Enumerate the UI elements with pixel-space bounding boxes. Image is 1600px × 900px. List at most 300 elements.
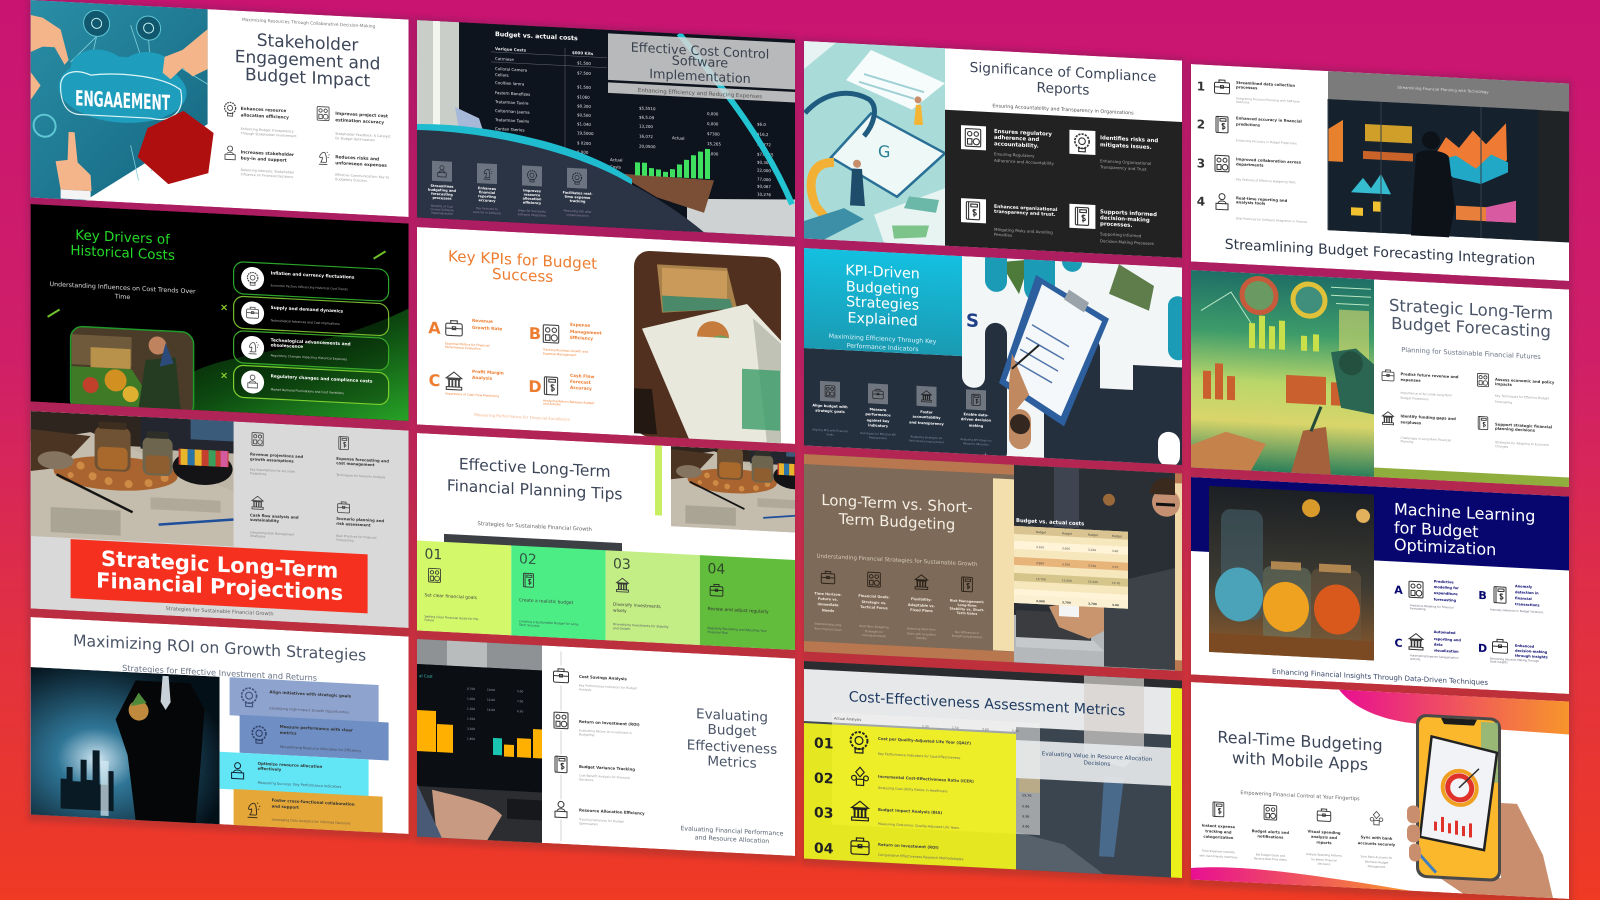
budget table: Varique Costs bbox=[495, 46, 527, 53]
comparison 4: Stability vs. Short- bbox=[950, 607, 985, 612]
title: Strategic Long-Term bbox=[1389, 296, 1553, 323]
budget table: $16,2 bbox=[757, 132, 769, 137]
faint table: 5.00 bbox=[1022, 804, 1029, 809]
metric 03: 03 bbox=[814, 805, 833, 822]
item: funding gaps: Planning bbox=[1400, 439, 1414, 444]
step 03: 03 bbox=[613, 556, 631, 573]
comparison 2: Strategic vs. bbox=[861, 600, 887, 605]
feature 3: Software Integration bbox=[518, 212, 547, 218]
step 01 bbox=[417, 540, 511, 635]
item: predict revenue: expenses bbox=[1400, 377, 1421, 383]
metric 03: Budget Impact Analysis (BIA) bbox=[878, 807, 942, 815]
capability B: transactions bbox=[1515, 602, 1540, 607]
budget table: $6,5.09 bbox=[639, 114, 655, 120]
item: organizational transparency: Enhances organizational bbox=[994, 204, 1058, 213]
budget table: 3.00 bbox=[1112, 549, 1118, 553]
photo: dashboard on monitor: 6.50 bbox=[517, 709, 523, 713]
panel: evaluating budget metrics slide bbox=[417, 639, 795, 857]
budget table: 3,700 bbox=[1062, 562, 1070, 567]
photo: coin jars and papers bbox=[31, 411, 234, 546]
feature 4: time expense bbox=[565, 195, 591, 200]
budget table: 11,000 bbox=[1062, 578, 1072, 583]
title: Machine Learning bbox=[1394, 499, 1535, 526]
item: scenario planning: Scenario planning and bbox=[336, 516, 384, 523]
metric 1 bbox=[551, 665, 638, 694]
item: cost estimation: for Budget Optimization bbox=[335, 136, 375, 142]
item: scenario planning: risk assessment bbox=[336, 521, 371, 528]
strategy 3: Foster bbox=[920, 410, 933, 415]
budget table: Tratarman Taeins bbox=[494, 117, 529, 124]
budget table: 19,5000 bbox=[577, 130, 594, 136]
dark curved panel bbox=[417, 123, 704, 232]
budget table: Costs bbox=[610, 164, 621, 170]
subtitle: Understanding Influences on Cost Trends Over bbox=[50, 281, 196, 296]
item: reduces risks: Effective Communication: Key to bbox=[335, 173, 389, 179]
title: Optimization bbox=[1394, 535, 1496, 559]
faint table: 15.70 bbox=[1022, 793, 1031, 798]
feature 1: Streamlines bbox=[431, 184, 453, 189]
green bar chart bbox=[635, 145, 710, 179]
subtitle: Strategies for Sustainable Financial Growth bbox=[166, 606, 274, 618]
capability A bbox=[1394, 577, 1459, 613]
budget table: $1.040 bbox=[577, 121, 591, 127]
step 4: 4 bbox=[1197, 194, 1205, 209]
title: Effective Long-Term bbox=[459, 455, 611, 481]
item: revenue projections: growth assumptions bbox=[250, 456, 294, 464]
item: scenario planning: Best Practices for Financial bbox=[336, 534, 377, 540]
item: reduces risks: unforeseen expenses bbox=[335, 160, 387, 169]
illustration: isometric documents: G bbox=[878, 142, 890, 161]
budget table: $5,5510 bbox=[639, 105, 656, 111]
item: assess impacts: impacts bbox=[1495, 381, 1513, 387]
budget table: $8.300 bbox=[577, 103, 591, 109]
comparison 1: Understanding Long- bbox=[814, 622, 842, 627]
item: identifies risks: Transparency and Trust bbox=[1099, 164, 1147, 172]
budget table: Fastern Banefizes bbox=[495, 90, 530, 97]
capability B: B bbox=[1478, 589, 1487, 602]
panel: key KPIs slide bbox=[417, 227, 795, 445]
item: resource allocation: allocation efficiency bbox=[241, 112, 289, 121]
metric 04: Return on Investment (ROI) bbox=[878, 842, 939, 850]
title box: Software bbox=[672, 54, 728, 72]
strategy 4 bbox=[960, 389, 992, 447]
step 03 bbox=[606, 550, 700, 645]
KPI B: Tracking Business Growth and bbox=[542, 347, 588, 354]
strategy card 3: Measuring Success: Key Performance Indicators bbox=[258, 781, 341, 789]
comparison 4: Risk Management: bbox=[950, 599, 984, 604]
photo: open report on desk bbox=[634, 250, 781, 444]
item: funding gaps bbox=[1382, 411, 1456, 446]
driver row 3: Technological advancements and bbox=[271, 337, 351, 348]
step 01: Set clear financial goals bbox=[424, 592, 478, 601]
photo: man in suit bbox=[804, 661, 1182, 879]
step 04 bbox=[700, 555, 795, 650]
photo: analyst at laptop bbox=[1014, 465, 1180, 671]
budget table: Budget bbox=[1036, 530, 1047, 535]
item: assess impacts: Assess economic and policy bbox=[1495, 377, 1555, 385]
KPI B: Efficiency bbox=[570, 335, 593, 342]
item: identifies risks: mitigates issues. bbox=[1100, 142, 1152, 151]
feature 1 bbox=[1199, 801, 1238, 859]
subtitle: Understanding Financial Strategies for Sustainable Growth bbox=[817, 554, 978, 568]
faint table: 1.50 bbox=[952, 726, 959, 730]
panel: machine learning slide bbox=[1191, 477, 1569, 694]
feature 4 bbox=[1358, 810, 1396, 870]
budget table: 3,700 bbox=[1062, 600, 1071, 605]
strategy 1: Goals bbox=[826, 432, 834, 437]
metric 04 bbox=[814, 836, 964, 864]
photo: businessman and skyline bbox=[31, 667, 220, 825]
item: resource allocation: Enhancing Budget Transparency bbox=[241, 127, 294, 134]
photo: coin jars bbox=[671, 436, 817, 534]
comparison 3: Balancing Short-Term bbox=[907, 626, 936, 632]
panel: stakeholder engagement slide bbox=[31, 0, 409, 217]
timeline line bbox=[560, 651, 562, 841]
title: for Budget bbox=[1394, 518, 1479, 541]
title: Budget Forecasting bbox=[1391, 314, 1551, 341]
capability D: decision-making bbox=[1515, 649, 1548, 654]
capability B: detection in bbox=[1515, 590, 1539, 595]
strategy 3: Performance Improvement bbox=[909, 438, 944, 444]
budget table: $7300 bbox=[707, 131, 720, 137]
feature 2 bbox=[473, 163, 501, 215]
feature 1: Control Software bbox=[430, 207, 454, 212]
comparison 2: Immediate Needs bbox=[862, 633, 886, 638]
step 2: Enhancing Accuracy in Budget Projections bbox=[1236, 138, 1297, 145]
driver row 1 bbox=[234, 261, 389, 301]
feature 3: Improves bbox=[523, 188, 541, 193]
panel: key drivers slide bbox=[31, 204, 409, 429]
feature 3 bbox=[518, 165, 547, 218]
title: with Mobile Apps bbox=[1232, 748, 1368, 774]
step 3: Improved collaboration across bbox=[1236, 156, 1302, 165]
budget table: 3,100 bbox=[1036, 545, 1044, 549]
photo: dashboard on monitor: 1.500 bbox=[467, 717, 475, 721]
subtitle: Empowering Financial Control at Your Fingertips bbox=[1240, 790, 1360, 802]
item: cash flow bbox=[250, 496, 299, 540]
strategy 4: Analyzing KPI Impact on bbox=[960, 437, 992, 443]
title box bbox=[608, 33, 795, 103]
item: predict revenue bbox=[1382, 370, 1459, 403]
strategy card 2: Measure performance with clear bbox=[280, 724, 353, 733]
feature 1: categorization bbox=[1203, 835, 1234, 840]
photo: dashboard on monitor: 12.00 bbox=[487, 698, 495, 702]
budget table: 10,276 bbox=[757, 192, 771, 197]
item: resource allocation: Through Stakeholder Involvement bbox=[240, 131, 297, 138]
title: Financial Planning Tips bbox=[447, 477, 623, 504]
KPI D bbox=[528, 371, 595, 408]
green glow bbox=[160, 308, 408, 421]
KPI A: Revenue bbox=[472, 318, 493, 325]
item: cost estimation: Stakeholder Feedback: A Catalyst bbox=[335, 132, 391, 139]
comparison 4: Term Gains bbox=[957, 611, 977, 616]
budget table: $ 0200 bbox=[577, 140, 591, 146]
title: Explained bbox=[848, 310, 918, 330]
title: Success bbox=[492, 265, 553, 286]
feature 3: for Better Financial bbox=[1311, 857, 1337, 863]
item: identifies risks bbox=[1069, 130, 1158, 172]
title: Maximizing ROI on Growth Strategies bbox=[73, 631, 366, 665]
title banner: Financial Projections bbox=[96, 567, 343, 605]
budget table: 22,000 bbox=[757, 168, 771, 173]
subtitle: Planning for Sustainable Financial Futures bbox=[1401, 346, 1541, 361]
feature 1: Instant expense bbox=[1202, 824, 1236, 829]
title box: Enhancing Efficiency and Reducing Expenses bbox=[638, 88, 762, 100]
capability C: visualization bbox=[1434, 649, 1459, 654]
feature 1: with User-Friendly Interfaces bbox=[1199, 853, 1238, 859]
budget table: 15,265 bbox=[707, 141, 721, 147]
strategy card 1: Identifying High-Impact Growth Opportunities bbox=[269, 706, 349, 714]
item: stakeholder buy-in: Influence on Financial Decisions bbox=[241, 172, 293, 179]
capability A: forecasting bbox=[1434, 598, 1457, 603]
comparison 2 bbox=[858, 572, 890, 638]
feature 4: Seamless Budget bbox=[1365, 859, 1388, 865]
item: revenue projections: Revenue projections and bbox=[250, 451, 303, 459]
comparison 1: Needs bbox=[822, 608, 834, 613]
subtitle: Strategies for Sustainable Financial Growth bbox=[478, 521, 592, 533]
strategy 2: against key bbox=[867, 418, 890, 423]
strategy 3 bbox=[909, 385, 945, 444]
budget table: Colterman Jaema bbox=[495, 108, 530, 115]
KPI A: Essential Metrics for Financial bbox=[445, 341, 490, 348]
capability C: Automating Expense Categorization bbox=[1410, 653, 1459, 660]
step 2: 2 bbox=[1197, 117, 1205, 132]
budget table: 0,000 bbox=[707, 151, 719, 157]
photo: engagement illustration bbox=[31, 0, 208, 207]
item: cash flow: Strategies bbox=[250, 534, 266, 539]
capability C bbox=[1394, 628, 1461, 663]
budget table: Tratarman Tavire bbox=[494, 99, 529, 106]
title: Effectiveness bbox=[687, 737, 777, 758]
item: regulatory adherence bbox=[961, 125, 1054, 166]
comparison 2: Financial Goals: bbox=[858, 594, 890, 599]
faint table: 3.50 bbox=[1022, 814, 1029, 819]
item: stakeholder buy-in: buy-in and support bbox=[241, 155, 287, 164]
strategy card 3: Optimize resource allocation bbox=[258, 761, 322, 769]
metric 01: Key Performance Indicators for Cost-Effectiveness bbox=[878, 752, 961, 760]
title: Key Drivers of bbox=[75, 227, 171, 248]
title: Budget bbox=[708, 722, 756, 740]
strategy 2: Measurement bbox=[869, 435, 887, 440]
budget table: $.000 bbox=[577, 149, 589, 155]
budget table: Budget vs. actual costs bbox=[1016, 518, 1084, 527]
faint table: 3.00 bbox=[1022, 824, 1029, 829]
budget table: $0,500 bbox=[577, 112, 591, 118]
feature 4: Measuring ROI after bbox=[564, 209, 592, 214]
capability A: Predictive Modeling for Financial bbox=[1410, 603, 1454, 610]
item: revenue projections: Projections bbox=[250, 471, 267, 476]
feature 4: tracking bbox=[570, 199, 586, 204]
metric 4 bbox=[551, 799, 645, 829]
feature 2: Set Budget Goals and bbox=[1256, 852, 1285, 858]
driver row 2 bbox=[234, 296, 389, 336]
feature 4: Sync with bank bbox=[1361, 835, 1393, 841]
title: Real-Time Budgeting bbox=[1217, 727, 1383, 755]
photo: analyst at data wall bbox=[1328, 99, 1569, 244]
feature 1: budgeting and bbox=[428, 188, 457, 193]
metric 4: Resource Allocation Efficiency bbox=[579, 807, 645, 816]
feature 3: efficiency bbox=[523, 200, 542, 205]
strategy 1 bbox=[812, 380, 848, 437]
strategy 2 bbox=[860, 383, 896, 441]
title: Engagement and bbox=[235, 47, 380, 75]
comparison 2: Tactical Focus bbox=[860, 605, 888, 610]
footer: Measuring Performance for Financial Excellence bbox=[474, 412, 570, 422]
step 1: Solutions bbox=[1236, 100, 1250, 105]
budget table: 16,072 bbox=[639, 133, 653, 139]
item: expense forecasting bbox=[335, 436, 389, 480]
feature 2: Receive Real-Time Alerts bbox=[1254, 856, 1288, 862]
strategy card 4: Foster cross-functional collaboration bbox=[272, 797, 355, 807]
budget table: Budget bbox=[1062, 531, 1073, 536]
item: organizational transparency: Mitigating Risks and Avoiding bbox=[994, 227, 1053, 235]
comparison 4 bbox=[950, 576, 985, 639]
budget table: $1.500 bbox=[577, 60, 591, 66]
step 4: Real-time reporting and bbox=[1236, 195, 1288, 203]
budget table: 0,000 bbox=[707, 111, 719, 117]
comparison 4: Long-Term bbox=[957, 603, 977, 608]
budget table: 3.00 bbox=[1112, 603, 1119, 607]
budget table: Catmiese bbox=[495, 56, 514, 62]
driver row 4 bbox=[234, 365, 389, 405]
driver row 2: Supply and demand dynamics bbox=[271, 305, 343, 315]
feature 2: Budget alerts and bbox=[1252, 829, 1289, 835]
feature 4: Sync Bank Accounts for bbox=[1361, 854, 1393, 860]
photo: dashboard on monitor: 14.00 bbox=[487, 708, 495, 712]
KPI D: Accuracy bbox=[570, 385, 592, 392]
capability D: Enhanced bbox=[1515, 644, 1535, 649]
driver row 4: Market Demand Fluctuations and Cost Variations bbox=[271, 387, 344, 395]
KPI B: Management bbox=[570, 329, 602, 337]
capability D: D bbox=[1478, 642, 1487, 655]
driver row 3: Regulatory Changes Impacting Historical Expenses bbox=[271, 353, 348, 361]
faint table: 2.30 bbox=[922, 724, 929, 728]
feature 3 bbox=[1306, 808, 1343, 867]
sub band bbox=[1016, 740, 1171, 786]
KPI B: B bbox=[529, 324, 541, 343]
KPI B bbox=[529, 320, 602, 359]
strategy card 4 bbox=[234, 789, 383, 834]
feature 1: Track Expenses Instantly bbox=[1201, 849, 1235, 854]
item: informed decisions: processes. bbox=[1100, 221, 1132, 229]
budget table: Conten Taeries bbox=[495, 126, 525, 133]
panel: compliance reports slide bbox=[804, 41, 1182, 258]
metric 03: Measuring Outcomes: Quality-Adjusted Life Years bbox=[878, 822, 959, 830]
illustration: clipboard with pill stripes: S bbox=[966, 310, 979, 332]
feature 3: Decisions bbox=[1318, 862, 1331, 866]
KPI B: Expense Management bbox=[543, 352, 577, 357]
capability B: financial bbox=[1515, 596, 1532, 601]
illustration: clipboard with pill stripes bbox=[804, 228, 1188, 473]
budget table: $7.500 bbox=[577, 70, 591, 76]
comparison 1 bbox=[813, 571, 842, 632]
strategy 2: Techniques for Effective KPI bbox=[860, 431, 896, 437]
item: resource allocation: Enhances resource bbox=[241, 106, 286, 114]
step 01: Future bbox=[424, 618, 434, 622]
panel: mobile budgeting slide bbox=[1191, 682, 1569, 899]
panel: maximizing ROI slide bbox=[31, 617, 409, 835]
budget table: $73,765 bbox=[757, 152, 774, 157]
strategy 4: Resource Allocation bbox=[963, 441, 989, 447]
step 3 bbox=[1197, 154, 1302, 185]
grey header band: Streamlining Financial Planning with Technology bbox=[1397, 85, 1489, 94]
panel: cost control software slide bbox=[417, 20, 795, 237]
feature 1: forecasting bbox=[431, 192, 453, 197]
red hexagon bbox=[138, 109, 214, 186]
strategy card 2: Streamlining Resource Allocation for Efficiency bbox=[280, 745, 361, 753]
KPI C bbox=[429, 367, 504, 398]
budget table: 3,700 bbox=[1088, 602, 1097, 606]
item: strategic decisions: Changes bbox=[1495, 444, 1508, 449]
item: predict revenue: Predict future revenue and bbox=[1400, 371, 1459, 379]
feature 4: Implementation bbox=[566, 213, 589, 218]
item: cash flow: Integrating Risk Management bbox=[250, 530, 295, 537]
step 03: wisely bbox=[613, 608, 627, 614]
capability B: Anomaly bbox=[1515, 584, 1533, 589]
title box: Implementation bbox=[649, 67, 751, 87]
item: scenario planning: Forecasting bbox=[336, 538, 354, 543]
item: informed decisions: decision-making bbox=[1100, 215, 1150, 224]
step 04: Review and adjust regularly bbox=[707, 606, 769, 615]
budget table: 77,000 bbox=[757, 177, 771, 182]
item: revenue projections: Key Assumptions for Accurate bbox=[250, 467, 295, 474]
strategy 2: Measure bbox=[870, 407, 887, 412]
metric 01: 01 bbox=[814, 736, 833, 753]
step 02 bbox=[511, 545, 606, 640]
item: reduces risks: Budgetary Success bbox=[335, 177, 367, 183]
item: expense forecasting: Techniques for Scenario Analysis bbox=[335, 473, 386, 479]
item: predict revenue: Importance of Accurate Long-Term bbox=[1400, 391, 1452, 397]
subtitle: and Resource Allocation bbox=[695, 834, 769, 845]
feature 4: Management bbox=[1368, 864, 1385, 869]
item: strategic decisions bbox=[1478, 416, 1552, 451]
feature 2: Enhances bbox=[478, 186, 496, 191]
item: informed decisions bbox=[1069, 204, 1157, 246]
teal arc bbox=[679, 34, 792, 204]
step 03: Diversify investments bbox=[613, 602, 661, 610]
item: stakeholder buy-in bbox=[225, 146, 295, 179]
comparison 1: Time Horizon: bbox=[814, 592, 842, 597]
step 03: and Growth bbox=[613, 626, 631, 631]
faint table: 3.80 bbox=[982, 727, 989, 732]
dark panel bbox=[945, 110, 1182, 258]
step 01: Setting Clear Financial Goals for the bbox=[424, 614, 479, 621]
metric 2: Budgeting bbox=[579, 732, 595, 737]
comparison 3: Flexibility: bbox=[911, 597, 932, 602]
KPI D: and Actuals bbox=[543, 402, 561, 406]
comparison 3: Adaptable vs. bbox=[908, 603, 935, 608]
item: predict revenue: Budget Projections bbox=[1400, 396, 1429, 401]
step 3: 3 bbox=[1197, 156, 1205, 171]
strategy 2: performance bbox=[865, 412, 891, 417]
KPI D: D bbox=[528, 377, 542, 396]
step 04: Financial Plan bbox=[707, 630, 728, 635]
item: funding gaps: surpluses bbox=[1400, 419, 1422, 425]
label: engagement word: ENGAAEMENT bbox=[75, 85, 170, 115]
item: expense forecasting: Expense forecasting and bbox=[336, 456, 389, 464]
comparison 3 bbox=[907, 574, 936, 641]
top gradient shape bbox=[1339, 690, 1569, 735]
feature 1: tracking and bbox=[1205, 829, 1232, 835]
item: assess impacts: Key Techniques for Effective Budget bbox=[1495, 394, 1550, 401]
capability A: modeling for bbox=[1434, 585, 1459, 590]
budget table: Actual bbox=[610, 157, 623, 163]
driver row 3: obsolescence bbox=[271, 342, 303, 350]
title: Term Budgeting bbox=[838, 511, 955, 534]
KPI C: Importance of Cash Flow Monitoring bbox=[445, 391, 499, 398]
feature 4: accounts securely bbox=[1358, 841, 1396, 847]
budget table: Actual bbox=[672, 135, 685, 141]
